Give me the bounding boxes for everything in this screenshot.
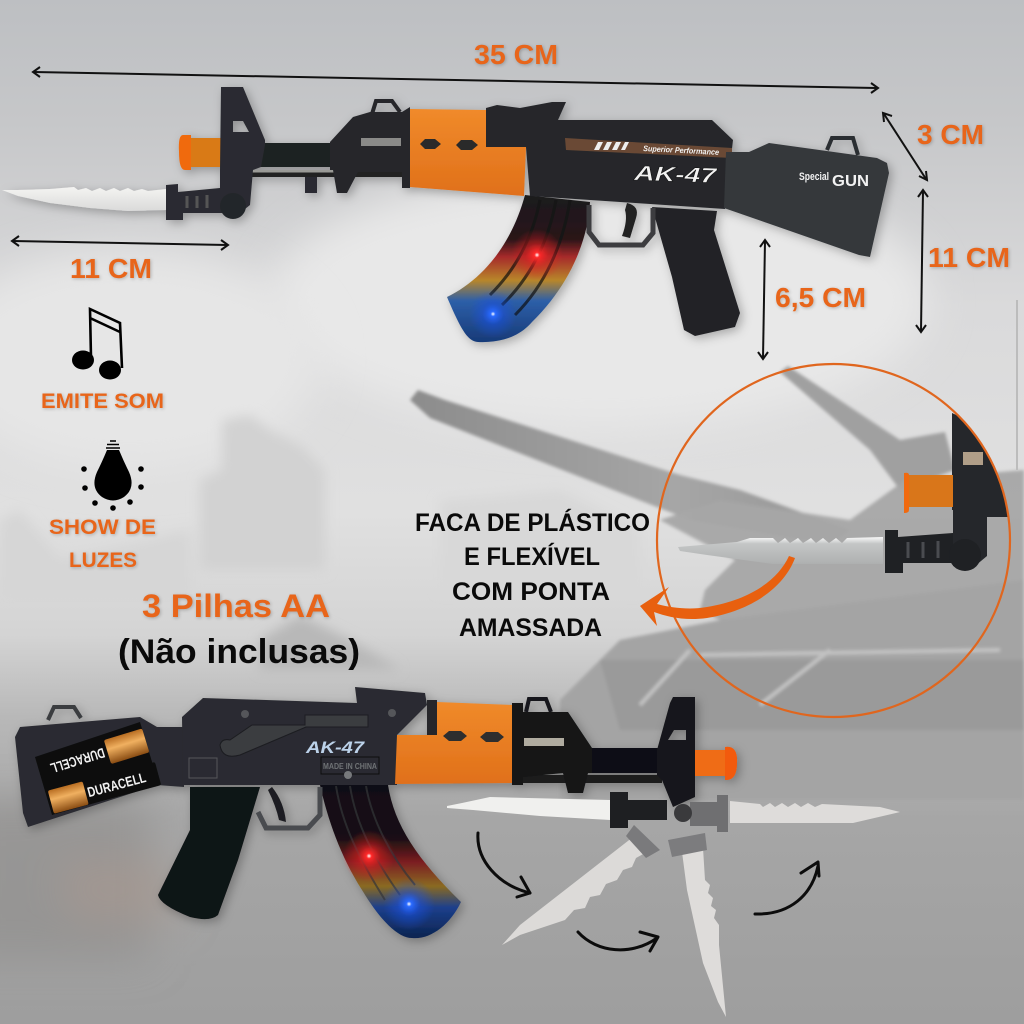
dimension: stock height 11 CM <box>916 190 1010 332</box>
batteries note: 3 Pilhas AA <box>142 588 330 624</box>
bottom rifle front sight <box>657 697 695 807</box>
top rifle bayonet knife <box>2 184 246 220</box>
top rifle stock <box>724 138 889 257</box>
bottom rifle receiver: AK-47 <box>305 738 366 757</box>
top rifle front sight <box>220 87 265 213</box>
bottom rifle trigger guard <box>258 787 320 828</box>
orange arrow from knife to text <box>640 556 795 626</box>
top rifle receiver <box>486 102 733 209</box>
bottom rifle stock <box>15 707 184 827</box>
knife note text <box>415 508 650 642</box>
ghost knife diagonal <box>502 825 660 945</box>
dimension: overall length 35 CM <box>33 39 878 93</box>
bottom rifle pistol grip <box>158 787 260 919</box>
icon: music notes <box>72 309 122 380</box>
label: show de luzes: LUZES <box>69 549 137 572</box>
dimension: knife length 11 CM: 11 CM <box>70 253 152 284</box>
product photo: bottom rifle with batteries <box>15 687 737 938</box>
bottom rifle magazine <box>320 785 461 938</box>
top rifle magazine <box>447 195 590 342</box>
top rifle pistol grip <box>652 207 740 336</box>
top rifle orange handguard <box>410 109 526 196</box>
detail: knife <box>678 537 883 564</box>
label: show de luzes <box>49 516 156 572</box>
top rifle stock: GUN <box>832 173 869 190</box>
top rifle barrel and rods <box>250 143 405 193</box>
knife note text: COM PONTA <box>452 578 610 606</box>
dimension: stock thickness 3 CM: 3 CM <box>917 119 984 150</box>
ghost knife down <box>668 833 726 1017</box>
batteries note <box>118 588 360 671</box>
battery compartment with batteries <box>35 722 161 815</box>
detail: front sight block <box>952 413 1008 566</box>
bottom rifle orange handguard <box>395 700 513 784</box>
top rifle receiver: AK-47 <box>632 162 718 188</box>
dimension: knife length 11 CM <box>12 236 228 284</box>
knife rotation sequence <box>447 792 900 1017</box>
dimension: grip height 6,5 CM <box>758 240 866 359</box>
product photo: top rifle with bayonet <box>2 87 889 342</box>
bottom rifle gas block and barrel <box>512 699 662 793</box>
dimension: stock thickness 3 CM <box>883 113 984 180</box>
bottom rifle muzzle <box>695 747 737 780</box>
batteries note: (Não inclusas) <box>118 633 360 671</box>
ghost knife right <box>690 795 900 832</box>
detail: muzzle <box>907 475 953 507</box>
callout circle: knife detail <box>657 364 1024 717</box>
rotation arrows <box>478 833 819 951</box>
battery lower: DURACELL <box>86 769 148 800</box>
top rifle receiver: Superior Performance <box>643 144 720 157</box>
main knife left <box>447 792 692 828</box>
icon: light bulb <box>81 441 144 511</box>
top rifle gas block <box>330 101 410 193</box>
knife note text: AMASSADA <box>459 614 602 642</box>
knife note text: FACA DE PLÁSTICO <box>415 508 650 537</box>
dimension: grip height 6,5 CM: 6,5 CM <box>775 282 866 313</box>
dimension: stock height 11 CM: 11 CM <box>928 242 1010 273</box>
dimension: overall length 35 CM: 35 CM <box>474 39 558 70</box>
top rifle muzzle <box>179 135 221 170</box>
label: show de luzes: SHOW DE <box>49 516 156 539</box>
battery upper, upside-down label: DURACELL <box>48 745 107 777</box>
bottom rifle receiver <box>182 687 427 785</box>
bottom rifle receiver: MADE IN CHINA <box>323 761 377 771</box>
top rifle trigger guard <box>589 203 653 245</box>
knife note text: E FLEXÍVEL <box>464 542 600 571</box>
label: emite som: EMITE SOM <box>41 390 164 413</box>
top rifle stock: Special <box>799 171 829 183</box>
